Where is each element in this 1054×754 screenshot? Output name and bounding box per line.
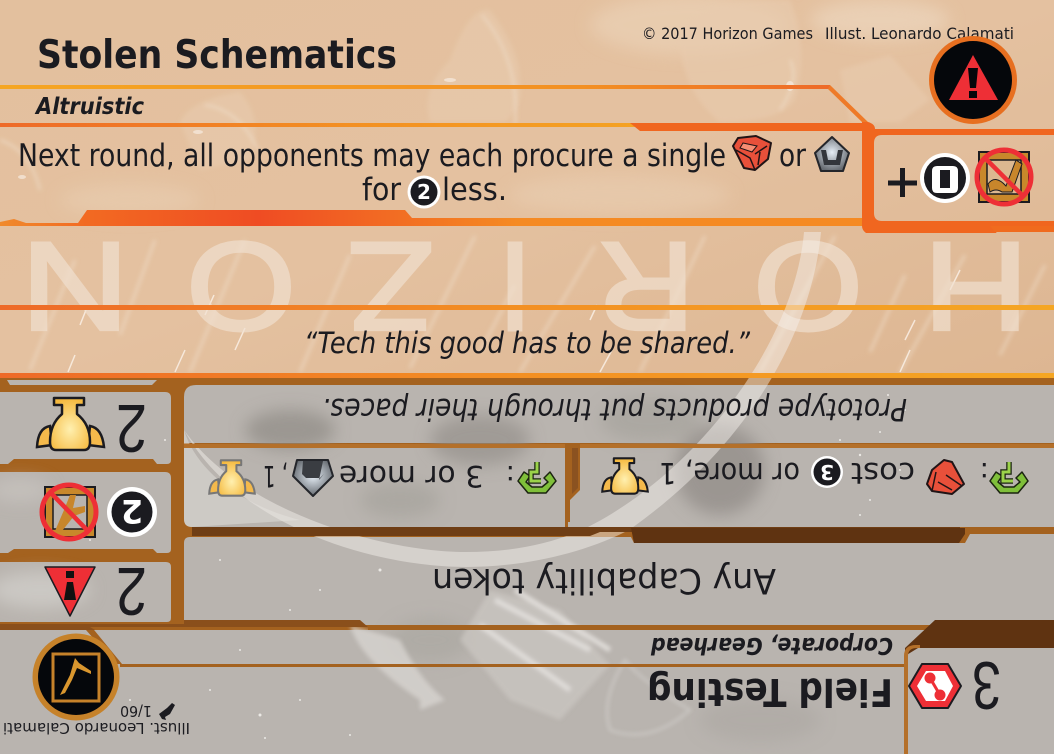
icon: cost 3: 3 bbox=[820, 460, 834, 484]
subtitle: Altruistic bbox=[34, 94, 144, 120]
background artwork: lower half bbox=[0, 394, 906, 742]
icon: grey gem inverted bbox=[293, 460, 333, 496]
frame: lower section lines bbox=[0, 444, 1054, 754]
requirement text right: cost: cost bbox=[851, 456, 915, 490]
icon: cost 2: 2 bbox=[417, 180, 431, 204]
any capability text: Any Capability token bbox=[432, 560, 776, 600]
rules word: or: or bbox=[779, 138, 806, 174]
colon left: : bbox=[506, 459, 515, 492]
watermark HORIZON rotated: I bbox=[497, 216, 533, 357]
watermark HORIZON rotated: O bbox=[186, 216, 296, 357]
icon: red crate bbox=[733, 136, 771, 170]
requirement text left: 1: , 1 bbox=[263, 459, 288, 493]
illustrator credit: Illust. Leonardo Calamati bbox=[825, 24, 1014, 43]
icon: green tech left bbox=[518, 462, 556, 493]
cost 3 rotated: 3 bbox=[972, 647, 1001, 723]
icon: no upgrade bbox=[977, 150, 1031, 204]
frame: lower orange line bbox=[0, 373, 1054, 378]
watermark HORIZON rotated: O bbox=[753, 216, 863, 357]
watermark HORIZON rotated: R bbox=[597, 216, 695, 357]
icon: corp badge bbox=[32, 634, 120, 720]
icon: green tech right bbox=[990, 462, 1028, 493]
background artwork: upper half bbox=[0, 0, 1045, 372]
icon: warning badge bbox=[929, 36, 1017, 124]
icon: trophy small left bbox=[209, 460, 255, 496]
requirement text left: 3 or more bbox=[339, 459, 484, 493]
title: Stolen Schematics bbox=[37, 33, 397, 78]
icon: red hexagon bbox=[909, 664, 961, 708]
rules word: less: less. bbox=[442, 172, 507, 208]
left box: inverted triangle icon and cost bbox=[45, 553, 147, 629]
middle orange rule bbox=[0, 305, 1054, 310]
icon: cost 3 bbox=[811, 456, 843, 488]
icon: trophy small right bbox=[602, 458, 648, 494]
icon: rocket bbox=[159, 703, 175, 720]
requirement text right: or more: or more, 1 bbox=[659, 456, 800, 490]
colon: : bbox=[980, 456, 989, 489]
watermark HORIZON rotated bbox=[20, 216, 1029, 357]
crescent inner disc bbox=[184, 430, 300, 527]
frame: upper orange lines bbox=[0, 85, 1054, 233]
left box: trophy cost bbox=[37, 390, 147, 466]
left box: no-upgrade and cost bbox=[42, 485, 157, 539]
large crescent arc bbox=[184, 232, 821, 567]
copyright: © 2017 Horizon Games bbox=[642, 24, 813, 43]
subtitle rotated: Corporate, Gearhead bbox=[651, 632, 893, 658]
rules word: for: for bbox=[362, 172, 401, 208]
rules text: line one: Next round, all opponents may each procure a single bbox=[18, 138, 726, 174]
watermark HORIZON rotated: Z bbox=[348, 216, 434, 357]
left box: no-upgrade and cost: 2 bbox=[121, 492, 143, 530]
card background: lower half bbox=[0, 378, 1054, 754]
illustrator credit rotated: Illust. Leonardo Calamati bbox=[3, 719, 190, 737]
icon: grey gem bbox=[815, 137, 849, 171]
watermark HORIZON rotated: H bbox=[923, 216, 1029, 357]
card background: upper half bbox=[0, 0, 1054, 378]
panel: lower grey boxes bbox=[0, 380, 1054, 754]
icon: cost 2 bbox=[408, 176, 440, 208]
icon: red crate inverted bbox=[927, 460, 964, 494]
card number: 1/60 bbox=[120, 702, 152, 720]
flavour text rotated: Prototype products put through their paces. bbox=[322, 391, 907, 426]
modifier: plus zero bbox=[888, 153, 970, 203]
title rotated: Field Testing bbox=[647, 670, 893, 714]
left box: trophy cost: 2 bbox=[116, 390, 147, 466]
left box: inverted triangle icon and cost: 2 bbox=[116, 553, 147, 629]
quote text: “Tech this good has to be shared.” bbox=[304, 326, 751, 360]
watermark HORIZON rotated: N bbox=[20, 216, 130, 357]
